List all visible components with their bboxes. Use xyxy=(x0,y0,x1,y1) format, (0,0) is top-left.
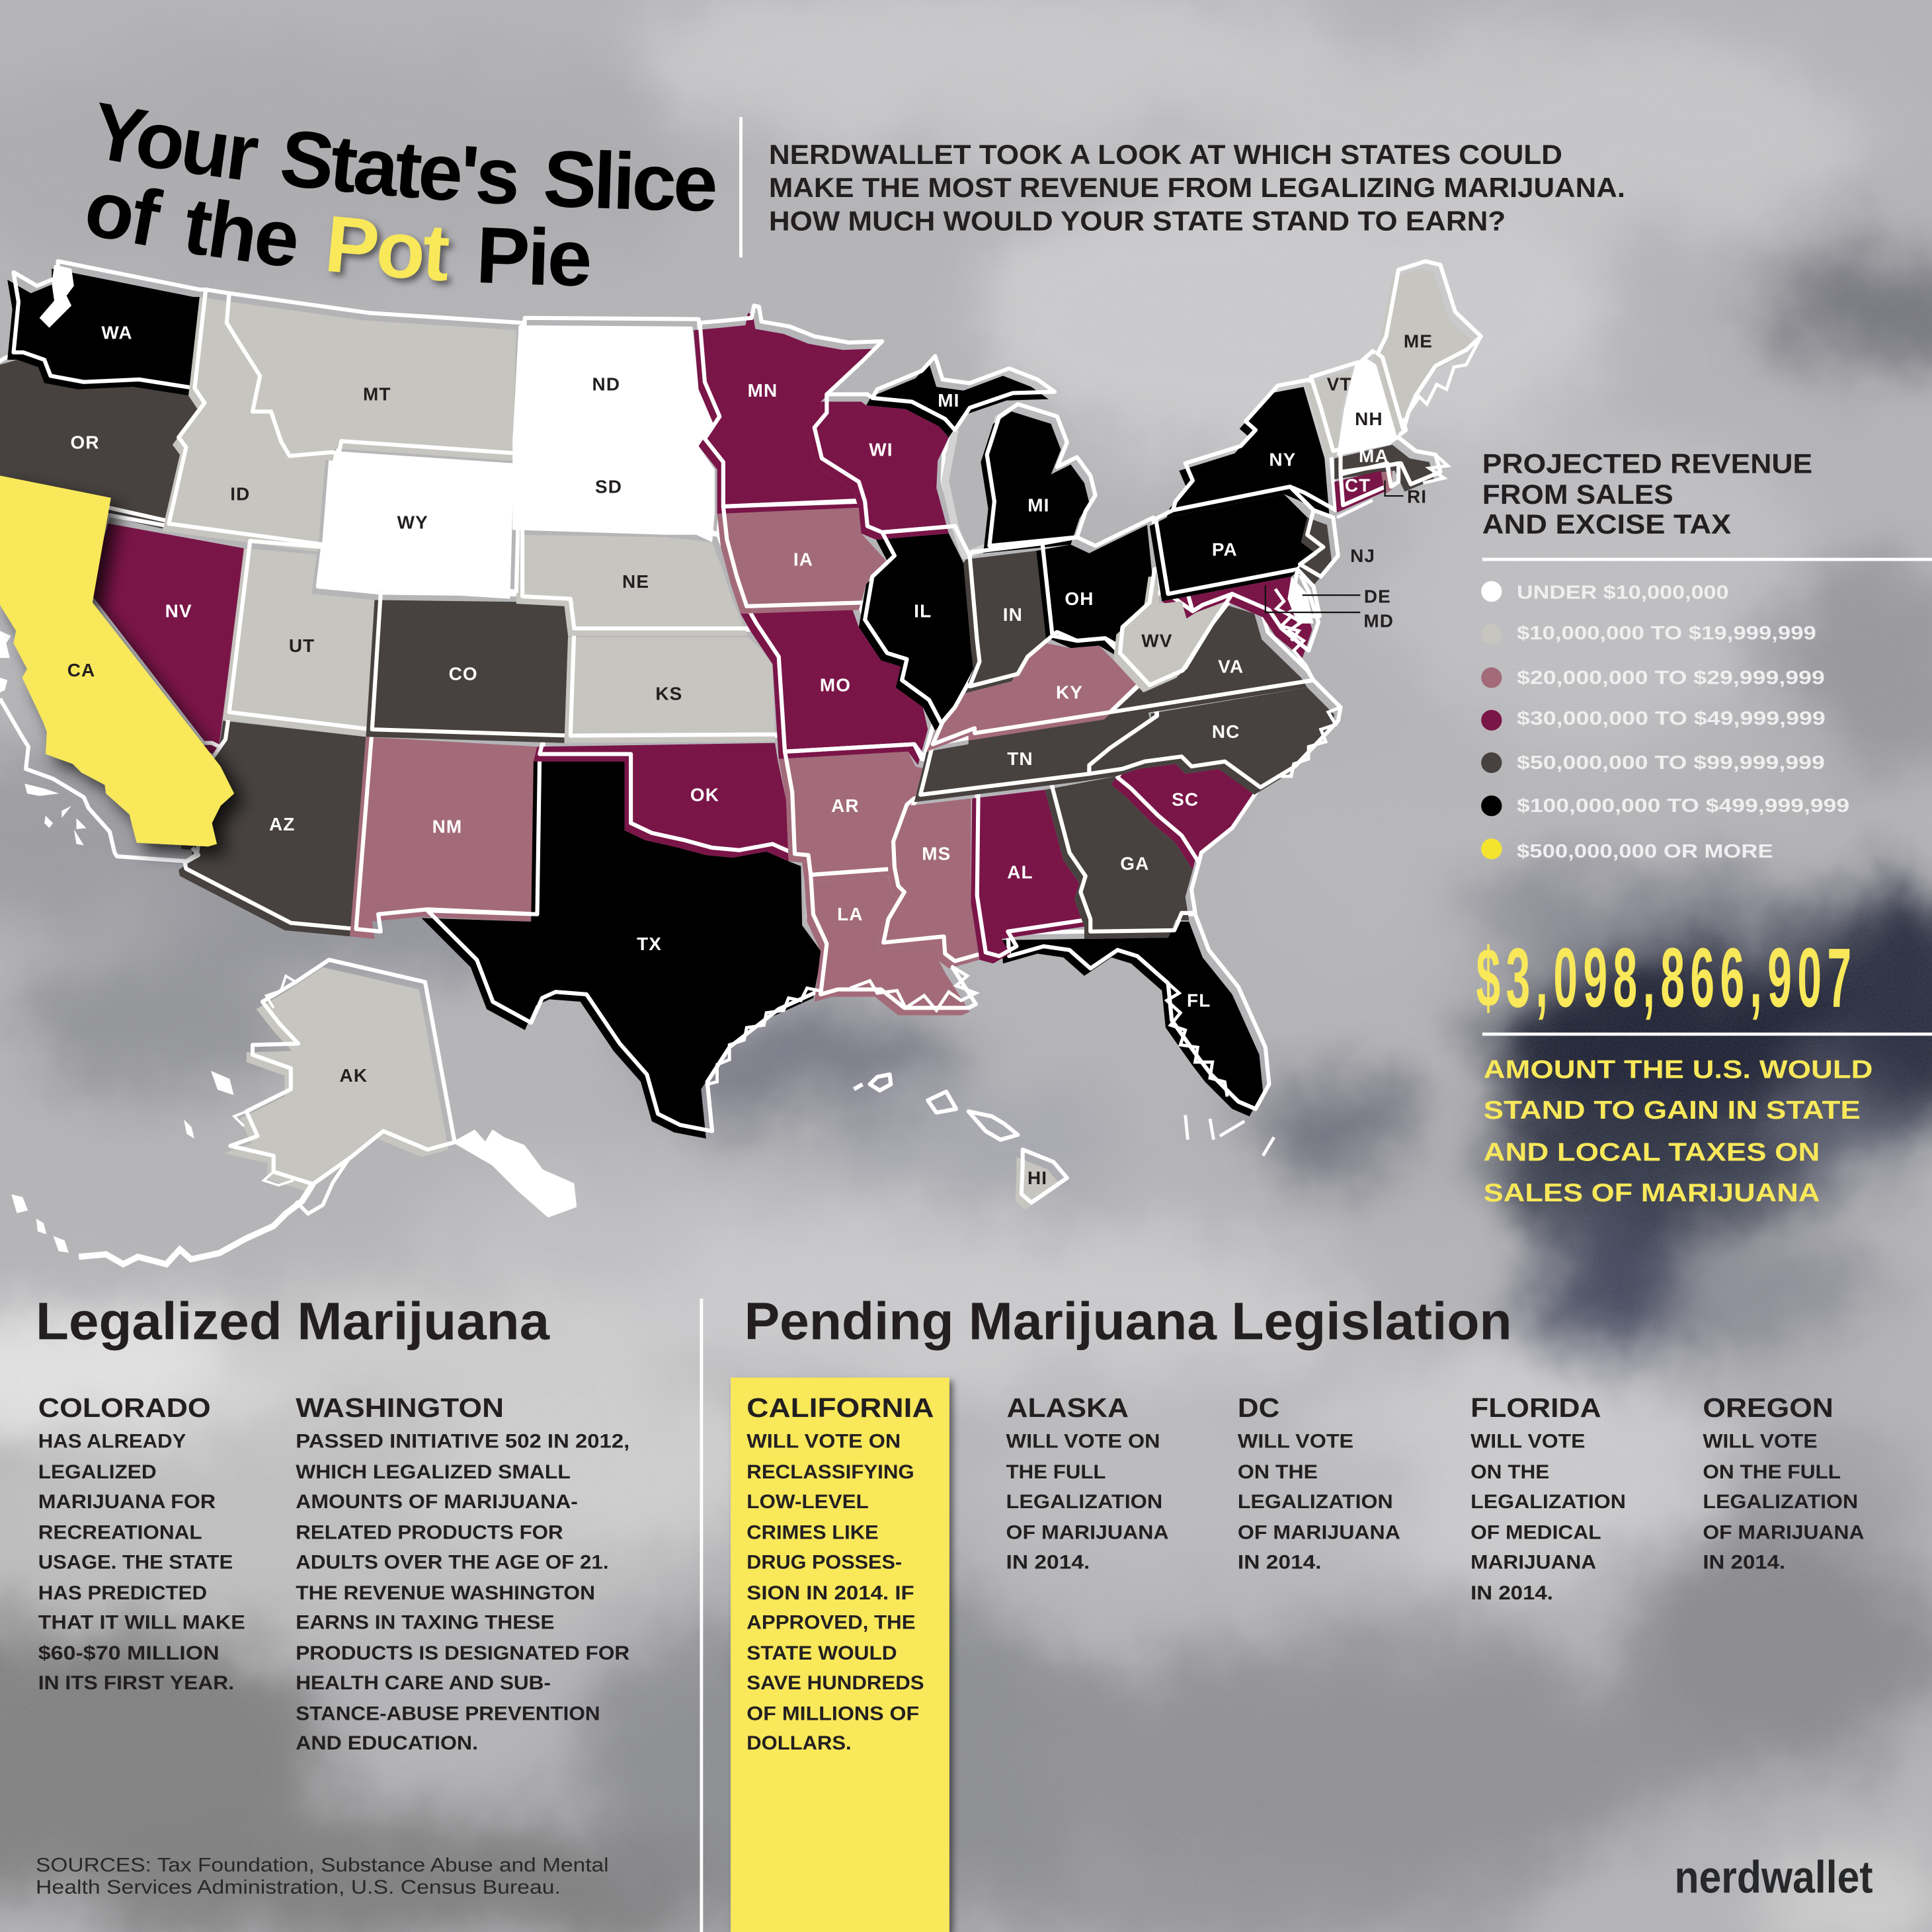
state: Vermont xyxy=(1305,362,1358,458)
state: New York xyxy=(1167,380,1336,518)
lake Michigan halo xyxy=(945,417,999,555)
legend item 30-50M xyxy=(1481,708,1826,731)
total description: AMOUNT THE U.S. WOULD xyxy=(1484,1056,1873,1084)
legend item 500M+: $500,000,000 OR MORE xyxy=(1517,841,1773,862)
state: Arizona xyxy=(179,713,372,936)
panel: Washington: PASSED INITIATIVE 502 IN 2012, xyxy=(296,1431,629,1453)
panel: Oregon: LEGALIZATION xyxy=(1703,1491,1858,1513)
panel: California highlight: OF MILLIONS OF xyxy=(746,1703,919,1724)
panel: DC: OF MARIJUANA xyxy=(1238,1522,1400,1544)
panel: Florida: ON THE xyxy=(1470,1461,1549,1483)
state: Alaska xyxy=(224,960,455,1191)
sources xyxy=(36,1855,609,1898)
panel: Washington xyxy=(296,1392,629,1754)
panel: California highlight: APPROVED, THE xyxy=(746,1612,916,1634)
panel: Colorado: MARIJUANA FOR xyxy=(38,1491,216,1513)
US map xyxy=(0,261,1481,1264)
legend item under 10M: UNDER $10,000,000 xyxy=(1517,583,1729,604)
total rule xyxy=(1482,1033,1932,1035)
state: Oregon xyxy=(0,352,204,528)
state: Montana: MT xyxy=(363,384,391,405)
state: Maryland xyxy=(1162,569,1318,658)
panel: Colorado: USAGE. THE STATE xyxy=(38,1551,233,1573)
state: Texas: TX xyxy=(637,934,662,954)
state: Colorado: CO xyxy=(449,664,478,684)
state: Michigan upper peninsula: MI xyxy=(938,390,960,411)
state: Louisiana xyxy=(805,869,976,1016)
legend heading: FROM SALES xyxy=(1482,479,1673,510)
panel: Colorado: HAS PREDICTED xyxy=(38,1582,207,1604)
panel: Florida: IN 2014. xyxy=(1470,1582,1553,1604)
panel: Oregon: OREGON xyxy=(1703,1392,1833,1423)
state: New Hampshire: NH xyxy=(1355,409,1383,429)
panel: Washington: WASHINGTON xyxy=(296,1392,504,1423)
state: Minnesota: MN xyxy=(748,380,778,401)
legend item 50-100M: $50,000,000 TO $99,999,999 xyxy=(1517,752,1825,774)
state: Michigan lower peninsula: MI xyxy=(1027,495,1050,515)
state: Texas xyxy=(421,754,828,1139)
state: North Carolina xyxy=(1083,680,1341,795)
state: Ohio: OH xyxy=(1065,588,1094,609)
state: Nevada: NV xyxy=(165,601,192,622)
panel: Washington: EARNS IN TAXING THESE xyxy=(296,1612,555,1634)
state: Florida: FL xyxy=(1187,990,1211,1010)
panel: Oregon xyxy=(1703,1392,1865,1573)
panel: Washington: WHICH LEGALIZED SMALL xyxy=(296,1461,571,1483)
state: Mississippi: MS xyxy=(922,844,951,864)
leader lines xyxy=(1266,481,1404,612)
state: Florida xyxy=(1002,914,1269,1116)
state: Minnesota xyxy=(694,305,882,514)
panel: Washington: AMOUNTS OF MARIJUANA- xyxy=(296,1491,578,1513)
state: Wisconsin: WI xyxy=(869,440,893,460)
state: Arkansas: AR xyxy=(831,795,860,816)
panel: Oregon: ON THE FULL xyxy=(1703,1461,1841,1483)
state: Iowa xyxy=(717,501,895,614)
state: West Virginia xyxy=(1114,569,1232,692)
legend item 30-50M: $30,000,000 TO $49,999,999 xyxy=(1517,708,1826,729)
small state labels: MD xyxy=(1363,611,1394,631)
state: Mississippi xyxy=(877,791,986,969)
panel: California highlight: DRUG POSSES- xyxy=(746,1551,902,1573)
heading: legalized: Legalized Marijuana xyxy=(36,1291,551,1351)
panel: California highlight: WILL VOTE ON xyxy=(746,1431,901,1453)
panel: California highlight: RECLASSIFYING xyxy=(746,1461,914,1483)
small state labels: RI xyxy=(1407,486,1427,506)
state: New Mexico xyxy=(350,729,543,939)
state: Wyoming: WY xyxy=(397,512,428,532)
state: South Carolina: SC xyxy=(1172,789,1199,810)
California coast outline xyxy=(0,631,198,862)
panel: Colorado: RECREATIONAL xyxy=(38,1522,202,1544)
state: New York: NY xyxy=(1269,449,1296,469)
panel: Alaska: THE FULL xyxy=(1006,1461,1106,1483)
total description: SALES OF MARIJUANA xyxy=(1484,1179,1820,1207)
title xyxy=(87,102,715,288)
panel: California highlight: SION IN 2014. IF xyxy=(746,1582,914,1604)
intro text: HOW MUCH WOULD YOUR STATE STAND TO EARN? xyxy=(769,205,1506,236)
panel: Colorado: COLORADO xyxy=(38,1392,211,1423)
panel: Alaska: LEGALIZATION xyxy=(1006,1491,1162,1513)
panel: California highlight xyxy=(731,1377,949,1932)
legend item 100-500M: $100,000,000 TO $499,999,999 xyxy=(1517,795,1849,817)
panel: Colorado: IN ITS FIRST YEAR. xyxy=(38,1672,234,1694)
panel: Alaska: ALASKA xyxy=(1006,1392,1129,1423)
state: Missouri xyxy=(741,602,934,765)
state: Iowa: IA xyxy=(793,549,813,569)
state: Connecticut: CT xyxy=(1345,475,1371,496)
state: California xyxy=(0,475,234,846)
state: North Carolina: NC xyxy=(1212,721,1240,742)
state: Colorado xyxy=(366,592,575,743)
state: Missouri: MO xyxy=(820,674,851,695)
panel: Alaska: OF MARIJUANA xyxy=(1006,1522,1169,1544)
state: North Dakota xyxy=(512,318,719,441)
panel: Washington: ADULTS OVER THE AGE OF 21. xyxy=(296,1551,609,1573)
state: South Dakota: SD xyxy=(595,476,622,497)
state: Georgia xyxy=(1045,769,1199,939)
state: Virginia: VA xyxy=(1218,656,1244,676)
sources: Health Services Administration, U.S. Census Bureau. xyxy=(36,1876,561,1898)
state: Idaho: ID xyxy=(230,484,250,504)
panel: California highlight: CALIFORNIA xyxy=(746,1392,934,1423)
state: Idaho xyxy=(163,290,331,552)
state: Virginia xyxy=(1104,598,1314,719)
panel: Washington: STANCE-ABUSE PREVENTION xyxy=(296,1703,600,1724)
legend item 500M+ xyxy=(1481,838,1773,862)
panel: California highlight: SAVE HUNDREDS xyxy=(746,1672,924,1694)
state: Georgia: GA xyxy=(1120,854,1149,874)
state: Michigan upper peninsula xyxy=(866,356,1055,438)
sources: SOURCES: Tax Foundation, Substance Abuse and Mental xyxy=(36,1855,609,1876)
state: Louisiana: LA xyxy=(837,904,864,924)
panel: Colorado: LEGALIZED xyxy=(38,1461,157,1483)
panel: DC: IN 2014. xyxy=(1238,1551,1322,1573)
title: of the Pot Pie xyxy=(87,188,589,288)
state: Hawaii xyxy=(854,1074,1067,1210)
state: Utah: UT xyxy=(289,635,315,656)
panel: California highlight: STATE WOULD xyxy=(746,1642,897,1664)
panel: Colorado: HAS ALREADY xyxy=(38,1431,186,1453)
state: Arizona: AZ xyxy=(269,814,295,834)
state: California: CA xyxy=(67,660,95,680)
state: Wyoming xyxy=(319,444,520,599)
state: Indiana xyxy=(963,543,1052,694)
panel: Washington: HEALTH CARE AND SUB- xyxy=(296,1672,551,1694)
state: Delaware xyxy=(1287,569,1320,624)
panel: Oregon: IN 2014. xyxy=(1703,1551,1785,1573)
state: Kansas: KS xyxy=(655,683,682,704)
panel: Florida: LEGALIZATION xyxy=(1470,1491,1626,1513)
panel: Florida: MARIJUANA xyxy=(1470,1551,1596,1573)
coast details xyxy=(40,265,1481,1156)
state: New Mexico: NM xyxy=(432,817,462,837)
panel: Washington: THE REVENUE WASHINGTON xyxy=(296,1582,595,1604)
state: Kansas xyxy=(564,629,781,743)
legend item 20-30M: $20,000,000 TO $29,999,999 xyxy=(1517,667,1825,688)
state: Michigan lower peninsula xyxy=(981,404,1096,553)
heading: pending: Pending Marijuana Legislation xyxy=(745,1291,1512,1351)
total description: AND LOCAL TAXES ON xyxy=(1484,1138,1820,1166)
state: Alaska: AK xyxy=(340,1065,368,1086)
state: Massachusetts xyxy=(1334,438,1440,492)
state: Nebraska xyxy=(516,528,754,636)
state: Oklahoma: OK xyxy=(690,784,719,805)
header divider xyxy=(739,117,743,257)
state: Ohio xyxy=(1036,518,1160,655)
legend item 10-20M: $10,000,000 TO $19,999,999 xyxy=(1517,623,1816,644)
small state labels xyxy=(1350,486,1427,631)
state: Illinois xyxy=(859,526,979,731)
panel: Florida: WILL VOTE xyxy=(1470,1431,1585,1453)
panel: DC: WILL VOTE xyxy=(1238,1431,1353,1453)
state: Hawaii: HI xyxy=(1027,1168,1047,1188)
legend heading: PROJECTED REVENUE xyxy=(1482,448,1812,479)
state: Connecticut xyxy=(1334,463,1391,512)
state: Maine xyxy=(1371,261,1481,438)
panel: California highlight: DOLLARS. xyxy=(746,1732,852,1754)
legend heading: AND EXCISE TAX xyxy=(1482,508,1731,540)
legend rule xyxy=(1482,558,1932,561)
state: Montana xyxy=(221,294,522,463)
state: Alabama: AL xyxy=(1007,862,1033,883)
total description xyxy=(1484,1056,1873,1207)
intro text xyxy=(769,139,1625,236)
state: Washington xyxy=(7,261,206,395)
state: Utah xyxy=(223,541,381,737)
state: Nevada xyxy=(80,515,250,755)
state: Pennsylvania: PA xyxy=(1212,539,1238,559)
state: Tennessee xyxy=(914,705,1157,802)
state: New Hampshire xyxy=(1337,351,1406,456)
state: Vermont: VT xyxy=(1327,374,1352,395)
panel: Alaska: IN 2014. xyxy=(1006,1551,1090,1573)
total description: STAND TO GAIN IN STATE xyxy=(1484,1096,1861,1125)
state: Illinois: IL xyxy=(914,601,932,622)
state: West Virginia: WV xyxy=(1141,630,1172,651)
state: Oregon: OR xyxy=(71,432,100,452)
state: Washington: WA xyxy=(101,322,133,342)
panel: Colorado: $60-$70 MILLION xyxy=(38,1642,220,1664)
panel: Colorado: THAT IT WILL MAKE xyxy=(38,1612,245,1634)
legend item under 10M xyxy=(1481,581,1729,604)
panel: Washington: PRODUCTS IS DESIGNATED FOR xyxy=(296,1642,629,1664)
panel: Alaska: WILL VOTE ON xyxy=(1006,1431,1160,1453)
state: Alabama xyxy=(971,782,1090,963)
panel: Florida: OF MEDICAL xyxy=(1470,1522,1601,1544)
small state labels: DE xyxy=(1364,586,1391,606)
panel: California highlight: CRIMES LIKE xyxy=(746,1522,879,1544)
state: Oklahoma xyxy=(534,736,795,862)
panel: Alaska xyxy=(1006,1392,1169,1573)
intro text: NERDWALLET TOOK A LOOK AT WHICH STATES COULD xyxy=(769,139,1562,170)
state: Maine: ME xyxy=(1404,331,1433,352)
panel: California highlight: LOW-LEVEL xyxy=(746,1491,869,1513)
panel: DC: LEGALIZATION xyxy=(1238,1491,1393,1513)
title: Your State's Slice xyxy=(99,102,715,212)
Alaska panhandle and Aleutian islands xyxy=(13,976,575,1264)
state: South Carolina xyxy=(1111,756,1260,870)
column divider xyxy=(700,1299,703,1932)
total amount: $3,098,866,907 xyxy=(1476,932,1857,1025)
state: Indiana: IN xyxy=(1003,604,1023,625)
legend heading xyxy=(1482,448,1812,540)
panel: DC xyxy=(1238,1392,1400,1573)
state: South Dakota xyxy=(512,431,721,542)
state: New Jersey xyxy=(1294,510,1338,584)
state: Tennessee: TN xyxy=(1007,748,1033,769)
panel: Florida xyxy=(1470,1392,1626,1604)
state: Rhode Island xyxy=(1381,463,1398,494)
panel: DC: DC xyxy=(1238,1392,1279,1423)
panel: Washington: AND EDUCATION. xyxy=(296,1732,478,1754)
panel: Oregon: OF MARIJUANA xyxy=(1703,1522,1865,1544)
panel: Oregon: WILL VOTE xyxy=(1703,1431,1818,1453)
state: Kentucky xyxy=(926,636,1145,752)
logo: nerdwallet: nerdwallet xyxy=(1675,1851,1873,1902)
panel: Colorado xyxy=(38,1392,245,1694)
state: North Dakota: ND xyxy=(592,374,620,395)
state: Wisconsin xyxy=(808,394,955,540)
state: Massachusetts: MA xyxy=(1359,446,1389,466)
panel: DC: ON THE xyxy=(1238,1461,1318,1483)
state: Pennsylvania xyxy=(1150,487,1323,601)
intro text: MAKE THE MOST REVENUE FROM LEGALIZING MARIJUANA. xyxy=(769,172,1625,203)
state: Kentucky: KY xyxy=(1056,682,1083,703)
small state labels: NJ xyxy=(1350,545,1375,566)
state: Arkansas xyxy=(779,745,932,882)
panel: Washington: RELATED PRODUCTS FOR xyxy=(296,1522,563,1544)
legend xyxy=(1481,581,1849,862)
state: Nebraska: NE xyxy=(622,571,649,592)
panel: Florida: FLORIDA xyxy=(1470,1392,1601,1423)
